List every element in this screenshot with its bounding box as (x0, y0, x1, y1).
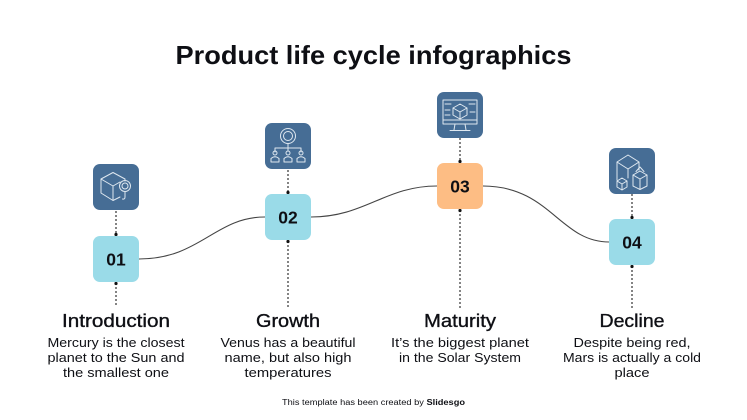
text: Growth description: Venus has a beautiful (220, 335, 356, 350)
number box 01 (93, 236, 139, 282)
number box 03: 03 (450, 176, 470, 196)
text: Introduction description: planet to the Sun and (48, 350, 184, 365)
icon: monitor with cube (437, 92, 483, 138)
number box 02: 02 (278, 208, 298, 228)
text: Growth description: temperatures (244, 365, 332, 380)
heading: Introduction: Introduction (62, 311, 170, 331)
text: Maturity description: It’s the biggest planet (391, 335, 529, 350)
connector: icon to box 02 (286, 170, 290, 307)
number box 01: 01 (106, 250, 126, 270)
connector: icon to box 03 (458, 138, 462, 308)
number box 04: 04 (622, 232, 642, 252)
number box 02 (265, 194, 311, 240)
stage 04: Decline (563, 148, 701, 380)
footer credit: This template has been created by Slidesgo (282, 398, 465, 407)
text: Decline description: place (614, 365, 650, 380)
text: Decline description: Despite being red, (574, 335, 690, 350)
stage 01: Introduction (48, 164, 185, 380)
connector: icon to box 04 (630, 194, 634, 308)
stage 02: Growth (220, 123, 356, 380)
connector: icon to box 01 (114, 211, 118, 307)
text: Introduction description: Mercury is the closest (48, 335, 185, 350)
text: Decline description (563, 335, 701, 380)
title: Product life cycle infographics (176, 40, 572, 70)
heading: Growth: Growth (256, 311, 320, 331)
icon: box with magnifier (93, 164, 139, 210)
text: Maturity description: in the Solar System (399, 350, 521, 365)
number box 03 (437, 163, 483, 209)
text: Maturity description (391, 335, 529, 365)
text: Decline description: Mars is actually a cold (563, 350, 701, 365)
stage 03: Maturity (391, 92, 529, 365)
text: Growth description (220, 335, 356, 380)
text: Introduction description (48, 335, 185, 380)
heading: Maturity: Maturity (424, 311, 496, 331)
number box 04 (609, 219, 655, 265)
timeline curve (139, 186, 609, 259)
text: Introduction description: the smallest one (63, 365, 169, 380)
heading: Decline: Decline (600, 311, 664, 331)
icon: stacked boxes (609, 148, 655, 194)
icon: hierarchy network (265, 123, 311, 169)
text: Growth description: name, but also high (224, 350, 352, 365)
